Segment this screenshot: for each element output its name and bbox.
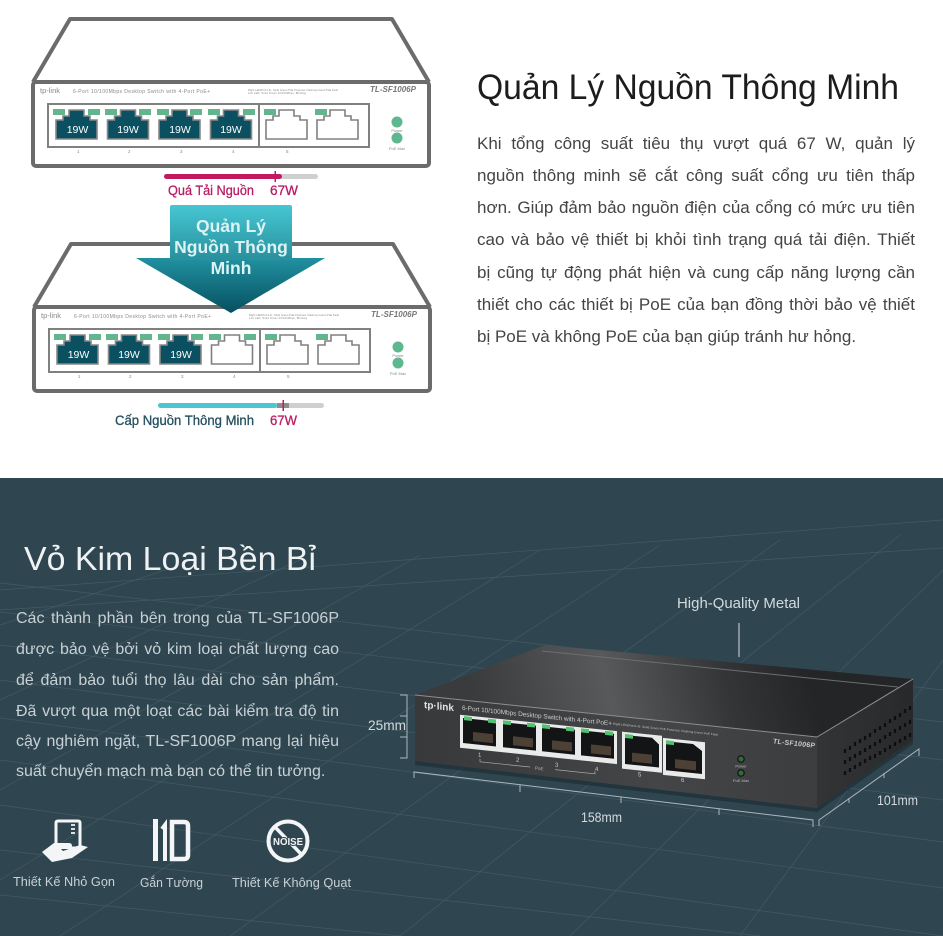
- switch front panel: [34, 307, 430, 391]
- empty ports: [212, 335, 359, 364]
- panel labels: Right LED(Port1-4): Solid Green:PoE Powered, Flashing Green:PoE Fault: [248, 88, 338, 92]
- text block: metal case description: [16, 610, 339, 780]
- front labels: 1: [478, 753, 482, 759]
- dimension: width 158mm: 158mm: [581, 810, 622, 825]
- front labels: 5: [638, 772, 642, 779]
- port wattage: 19W: [68, 349, 89, 361]
- panel: dark metal section background: [0, 478, 943, 936]
- panel labels: 2: [129, 374, 132, 379]
- powered ports: [56, 110, 252, 139]
- front labels: TL-SF1006P: [773, 738, 815, 750]
- arrow: smart power management: [136, 205, 325, 313]
- front labels: 6: [681, 778, 685, 784]
- text block: metal case description: Các thành phần bên trong của TL-SF1006P: [16, 610, 339, 627]
- dimension: depth 101mm: [819, 749, 919, 826]
- icon label: fanless: Thiết Kế Không Quạt: [232, 875, 351, 890]
- panel labels: [41, 310, 418, 379]
- panel labels: 1: [77, 149, 80, 154]
- status LEDs: Power: [391, 128, 403, 133]
- text block: metal case description: Đã vượt qua một loạt các bài kiểm tra độ tin: [16, 703, 339, 720]
- status LEDs: [389, 116, 405, 151]
- dimension: width 158mm: [414, 772, 813, 827]
- port wattage: 19W: [117, 124, 139, 136]
- text block: smart power description: bị cũng tự động phát hiện và cung cấp năng lượng cần: [477, 263, 915, 282]
- dimension: depth 101mm: 101mm: [877, 793, 918, 808]
- panel labels: TL-SF1006P: [371, 310, 418, 319]
- panel labels: 4: [232, 149, 235, 154]
- smart power label: 67W: [270, 413, 297, 428]
- background grid: [0, 520, 943, 936]
- arrow: smart power management: Minh: [211, 258, 251, 278]
- callout: high-quality metal: High-Quality Metal: [677, 596, 800, 612]
- heading: metal case: Vỏ Kim Loại Bền Bỉ: [24, 540, 317, 577]
- dimension: height 25mm: [368, 695, 407, 758]
- icon: wall mount: [153, 819, 188, 861]
- overload label: Quá Tải Nguồn: [168, 183, 254, 198]
- top face: [415, 645, 913, 737]
- product: switch photo: [415, 645, 913, 812]
- status LEDs: [390, 342, 406, 376]
- front labels: 3: [555, 763, 559, 769]
- shadow: [415, 740, 913, 812]
- ports: [460, 715, 705, 779]
- panel labels: tp-link: [40, 86, 60, 95]
- text block: metal case description: để đảm bảo tuổi thọ lâu dài cho sản phẩm.: [16, 672, 339, 689]
- panel labels: 6-Port 10/100Mbps Desktop Switch with 4-Port PoE+: [73, 89, 210, 95]
- port wattage: [68, 349, 192, 361]
- port wattage: 19W: [67, 124, 88, 136]
- port LEDs: [54, 334, 328, 340]
- panel labels: Right LED(Port1-4): Solid Green:PoE Powered, Flashing Green:PoE Fault: [249, 313, 339, 317]
- dimension: height 25mm: 25mm: [368, 718, 406, 733]
- port wattage: [67, 124, 242, 136]
- text block: smart power description: thiết cho các thiết bị PoE của bạn đồng thời bảo vệ thiết: [477, 295, 915, 314]
- status LEDs: PoE Max: [390, 371, 406, 376]
- port LEDs: [53, 109, 327, 115]
- panel labels: 3: [180, 149, 183, 154]
- front labels: Right LED(Port1-4): Solid Green:PoE Powered, Flashing Green:PoE Fault: [613, 722, 718, 737]
- heading: smart power: Quản Lý Nguồn Thông Minh: [477, 68, 899, 107]
- status LEDs: PoE Max: [733, 778, 749, 783]
- port wattage: 19W: [170, 349, 192, 361]
- switch front panel: [33, 82, 429, 166]
- port wattage: 19W: [220, 124, 242, 136]
- PoE bracket: [480, 759, 595, 774]
- panel labels: [40, 85, 417, 154]
- empty ports: [266, 110, 358, 139]
- port wattage: 19W: [169, 124, 191, 136]
- switch diagram: overloaded: [33, 19, 429, 166]
- overload label: 67W: [270, 183, 298, 198]
- front labels: tp·link: [424, 700, 454, 714]
- panel labels: 1: [78, 374, 81, 379]
- smart power bar: [158, 400, 324, 411]
- panel labels: Left LED: Solid Green:10/100Mbps, Blinking: [248, 91, 307, 95]
- switch top outline: [34, 244, 430, 307]
- status LEDs: Power: [392, 353, 404, 358]
- panel labels: 5: [287, 374, 290, 379]
- icon label: compact design: Thiết Kế Nhỏ Gọn: [13, 874, 115, 889]
- text block: metal case description: được bảo vệ bởi vỏ kim loại chất lượng cao: [16, 641, 339, 658]
- overload power bar: [164, 171, 318, 182]
- icon: compact design: [42, 821, 88, 862]
- callout: high-quality metal: [677, 596, 800, 657]
- icon: fanless no noise: [268, 822, 308, 860]
- PoE label: PoE: [535, 766, 543, 771]
- panel labels: TL-SF1006P: [370, 85, 417, 94]
- port frame: [48, 104, 369, 147]
- powered ports: [57, 335, 201, 364]
- right side: [817, 679, 913, 808]
- status LEDs: [733, 756, 749, 783]
- smart power label: Cấp Nguồn Thông Minh: [115, 413, 254, 428]
- panel labels: 4: [233, 374, 236, 379]
- text block: smart power description: bị PoE và không PoE của bạn giúp tránh hư hỏng.: [477, 327, 856, 346]
- text block: metal case description: cậy nghiêm ngặt, TL-SF1006P mang lại hiệu: [16, 733, 339, 750]
- text block: smart power description: cao và bảo vệ thiết bị khỏi tình trạng quá tải điện. Thiết: [477, 230, 915, 249]
- icon: fanless no noise: NOISE: [273, 837, 303, 848]
- text block: smart power description: nguồn thông minh sẽ cắt công suất cổng ưu tiên thấp: [477, 166, 915, 185]
- front labels: 2: [516, 758, 520, 764]
- front face: [415, 695, 817, 808]
- panel labels: 3: [181, 374, 184, 379]
- panel labels: Left LED: Solid Green:10/100Mbps, Blinking: [249, 316, 308, 320]
- port frame: [49, 329, 370, 372]
- text block: smart power description: [477, 134, 915, 346]
- panel labels: tp-link: [41, 311, 61, 320]
- port wattage: 19W: [118, 349, 140, 361]
- switch diagram: smart managed: [34, 244, 430, 391]
- text block: smart power description: hơn. Giúp đảm bảo nguồn điện của cổng có mức ưu tiên: [477, 198, 915, 217]
- panel labels: 5: [286, 149, 289, 154]
- arrow: smart power management: Nguồn Thông: [174, 237, 288, 257]
- panel labels: 6-Port 10/100Mbps Desktop Switch with 4-Port PoE+: [74, 314, 211, 320]
- front labels: 4: [595, 767, 599, 773]
- arrow: smart power management: Quản Lý: [196, 216, 266, 236]
- icon label: wall mount: Gắn Tường: [140, 875, 203, 890]
- text block: smart power description: Khi tổng công suất tiêu thụ vượt quá 67 W, quản lý: [477, 134, 915, 153]
- front labels: [424, 700, 815, 798]
- status LEDs: PoE Max: [389, 146, 405, 151]
- status LEDs: Power: [735, 764, 747, 768]
- switch top outline: [33, 19, 429, 82]
- front labels: 6-Port 10/100Mbps Desktop Switch with 4-Port PoE+: [462, 705, 612, 728]
- text block: metal case description: suất chuyển mạch mà bạn có thể tin tưởng.: [16, 763, 325, 780]
- panel labels: 2: [128, 149, 131, 154]
